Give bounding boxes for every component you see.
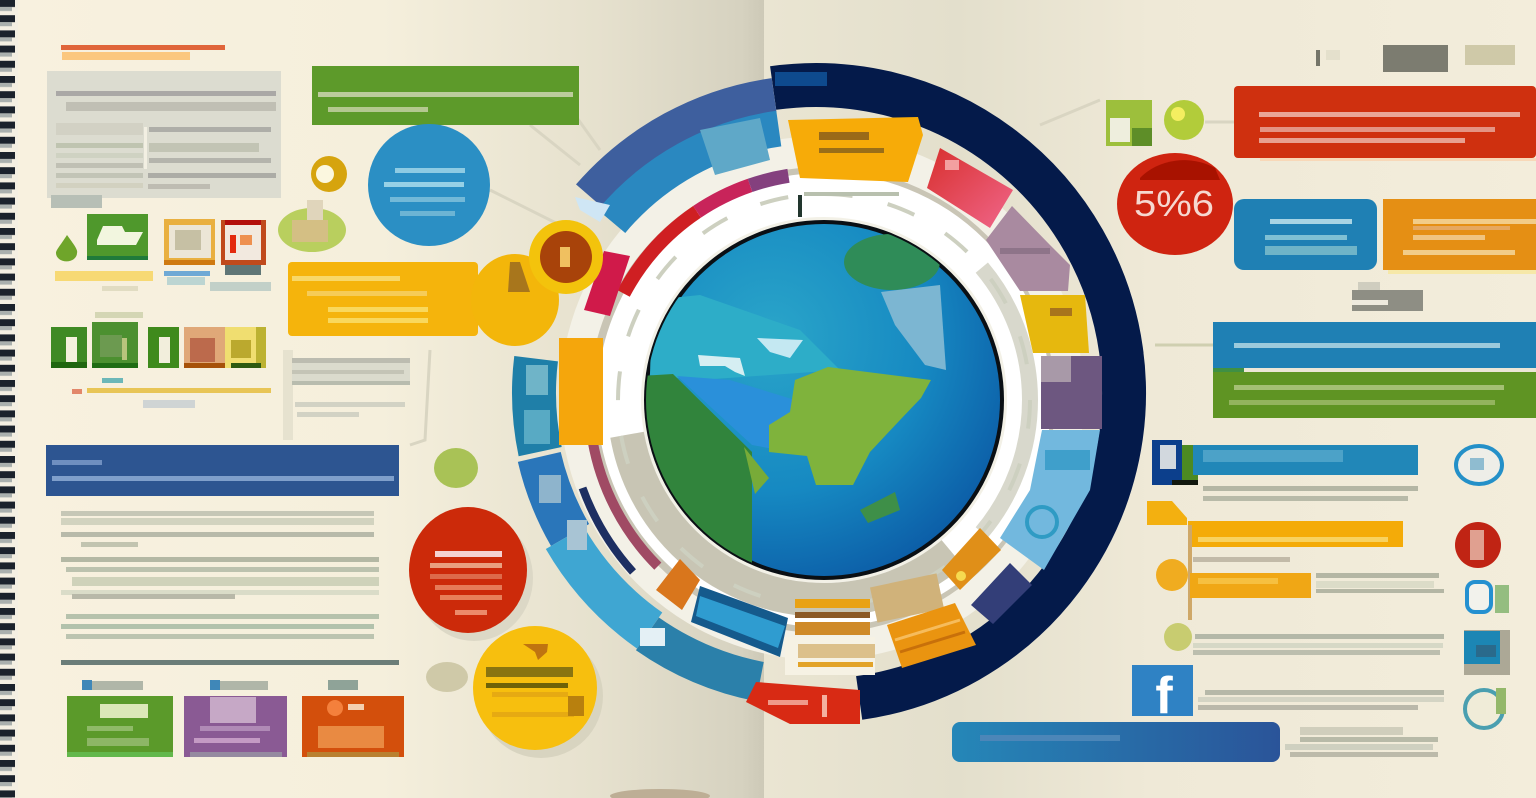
icon: blue speech circle <box>1456 446 1502 484</box>
ring shadow <box>612 190 1032 610</box>
blue box <box>1234 199 1377 270</box>
box labels <box>82 680 358 690</box>
icon: green disc <box>1164 100 1204 140</box>
yellow coin with orange centre <box>529 220 603 294</box>
icon: thumb badge <box>278 200 346 252</box>
ring detail patches <box>524 118 770 646</box>
icon: facebook <box>1132 665 1193 725</box>
red circle callout <box>409 507 533 641</box>
bottom grey text <box>1285 727 1438 757</box>
red segment <box>927 148 1013 228</box>
red stat circle <box>1117 153 1233 255</box>
light blue segment <box>1000 430 1100 570</box>
green banner <box>312 66 579 125</box>
blue circle callout <box>368 124 490 246</box>
background: left page <box>0 0 764 798</box>
icon: yellow coin <box>311 156 347 192</box>
right list icon: monitor <box>1152 440 1198 485</box>
right list: grey text <box>1316 573 1444 593</box>
right list: yellow icon <box>1156 559 1188 591</box>
row two caption <box>72 312 271 408</box>
yellow blob with icon <box>471 254 559 346</box>
icon: facebook: f <box>1155 667 1173 725</box>
orange segment <box>559 338 603 445</box>
pale patch <box>881 285 946 370</box>
right list: yellow bar <box>1188 521 1403 547</box>
yellow segment <box>1020 295 1089 353</box>
divider heading bar <box>61 660 399 665</box>
icon: teal ring <box>1465 688 1506 728</box>
icon: green tile <box>1106 100 1152 146</box>
top green blob <box>844 234 940 290</box>
blue banner <box>46 445 399 496</box>
red bottom segment <box>746 682 860 724</box>
background: right page <box>764 0 1536 798</box>
navy segment <box>971 563 1032 624</box>
navy outer arc <box>468 45 1164 741</box>
icons row two <box>51 322 266 368</box>
right list: second yellow bar <box>1190 573 1311 598</box>
green box <box>67 696 173 757</box>
right list: grey text two <box>1193 634 1444 655</box>
purple segment <box>1041 356 1102 429</box>
icon: green drop <box>56 235 77 261</box>
bottom blue gradient banner <box>952 722 1280 762</box>
blue bar segment <box>691 586 788 657</box>
left blue ring segments <box>391 0 1241 798</box>
blue and green banner <box>1213 322 1536 418</box>
striped stack <box>785 599 875 675</box>
small grey emblem <box>1352 282 1423 311</box>
right list: yellow tag <box>1147 501 1187 525</box>
icon captions <box>55 271 271 291</box>
white inner ring <box>534 110 1114 690</box>
small green island <box>860 492 900 523</box>
white specks <box>698 355 745 376</box>
ring backing fill <box>560 136 1084 660</box>
icon: red frame chart <box>221 220 266 275</box>
light ice features <box>757 338 803 358</box>
orange small segment <box>656 559 700 610</box>
spiral binding <box>0 0 18 798</box>
small green piece <box>744 447 769 494</box>
red to purple arc <box>509 85 1139 715</box>
connector line <box>1188 525 1192 620</box>
yellow banner <box>288 262 478 336</box>
beige icon <box>426 662 468 692</box>
purple box <box>184 696 287 757</box>
connector lines <box>410 100 1234 445</box>
right list: grey text three <box>1198 690 1444 710</box>
icon: red badge <box>1455 522 1501 568</box>
icon: green cloud card <box>87 214 148 260</box>
orange box <box>1383 199 1536 274</box>
light ocean band <box>650 295 840 380</box>
panel: grey text block <box>47 71 281 198</box>
yellow callout circle, bottom left <box>473 626 603 758</box>
tan block <box>870 573 944 623</box>
green continent <box>769 367 931 485</box>
right list: blue bar <box>1193 445 1418 501</box>
red banner <box>1234 86 1536 161</box>
icon: blue square <box>1464 630 1510 675</box>
icon: gold frame chart <box>164 219 215 265</box>
globe <box>635 220 1004 590</box>
orange segment lower right <box>942 528 1001 590</box>
top right header text <box>1316 45 1515 72</box>
inner maroon and navy arcs <box>461 37 1187 763</box>
mauve segment <box>986 206 1070 291</box>
orange box <box>302 696 404 757</box>
orange text block <box>887 603 976 668</box>
title bars <box>61 45 225 60</box>
crimson segment <box>584 251 630 316</box>
body text <box>61 511 379 639</box>
right list: olive icon <box>1164 623 1192 651</box>
dark green landmass <box>646 374 752 563</box>
red stat circle: 5%6 <box>1134 183 1214 224</box>
spine shadow at bottom <box>610 789 710 798</box>
icon: blue ring with green tab <box>1467 582 1509 613</box>
right list: grey line <box>1193 557 1290 562</box>
header tab above globe <box>798 192 899 217</box>
yellow top segment <box>788 117 923 182</box>
grey text block: middle <box>283 350 410 440</box>
tag under panel <box>51 195 102 208</box>
blue sea patches <box>677 376 795 452</box>
icon: green blob <box>434 448 478 488</box>
